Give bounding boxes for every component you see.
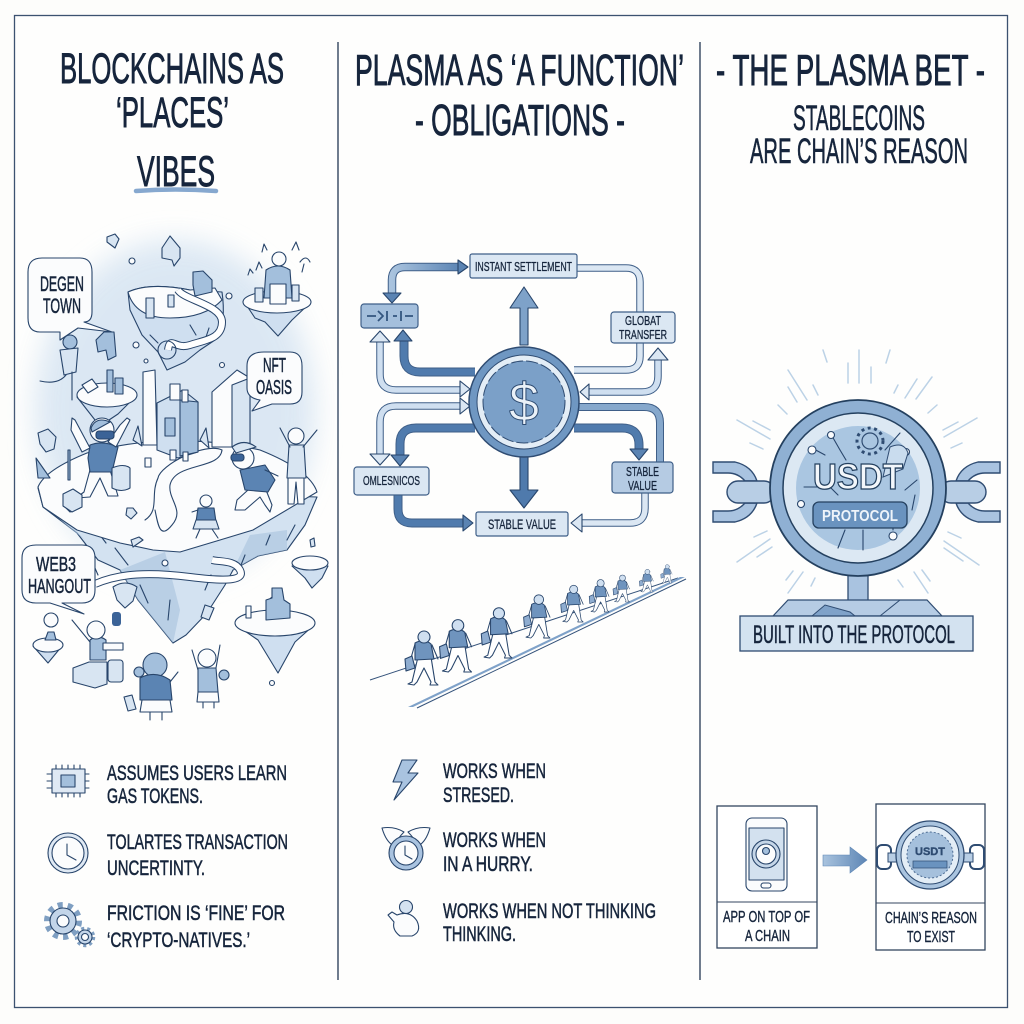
box: stable value bottom — [476, 512, 568, 536]
degen figure — [40, 335, 78, 400]
box: omlesnicos — [354, 467, 429, 495]
arrows: dark routes — [383, 260, 660, 531]
text: friction: FRICTION IS ‘FINE’ FOR — [107, 901, 285, 925]
speech bubble: degen town — [28, 258, 112, 340]
box: instant settlement — [470, 254, 577, 278]
card: app on top of a chain: APP ON TOP OF — [723, 909, 810, 926]
card: chain's reason to exist — [876, 804, 985, 950]
central dollar coin: $ — [509, 373, 539, 433]
text: gas tokens — [107, 761, 287, 808]
stem — [848, 575, 868, 602]
icon: lightning — [393, 760, 418, 800]
text: stressed: STRESED. — [443, 783, 514, 807]
text: hurry: IN A HURRY. — [443, 852, 533, 876]
text: stressed — [443, 759, 546, 807]
walkers — [405, 565, 672, 685]
lower right island — [235, 588, 315, 673]
illustration: USDT protocol seal — [713, 350, 1000, 651]
right small island — [292, 556, 328, 588]
card: chain's reason to exist: CHAIN’S REASON — [885, 910, 977, 927]
icon: gears — [47, 905, 94, 946]
city towers — [133, 370, 250, 467]
box: global transfer: TRANSFER — [619, 327, 667, 342]
right chain link — [940, 462, 1000, 522]
heading: plasma bet — [716, 46, 985, 171]
text: friction — [107, 901, 285, 952]
box: stable value bottom: STABLE VALUE — [488, 516, 556, 532]
text: not thinking: THINKING. — [443, 922, 516, 946]
mini seal — [877, 821, 984, 889]
small hanging rock — [113, 583, 137, 608]
text: uncertainty — [107, 830, 288, 880]
illustration: floating islands — [22, 234, 328, 720]
text: friction: ‘CRYPTO-NATIVES.’ — [107, 928, 250, 952]
box: stable value right: VALUE — [628, 478, 657, 493]
card: app on top of a chain: A CHAIN — [745, 928, 790, 945]
heading: blockchains as places: VIBES — [137, 148, 215, 196]
seated person — [72, 612, 123, 688]
icon: clock — [48, 833, 88, 873]
speech bubble: degen town: DEGEN — [40, 273, 84, 296]
text: gas tokens: ASSUMES USERS LEARN — [107, 761, 287, 785]
icon: winged clock — [382, 828, 430, 870]
arrows: light routes — [370, 268, 668, 532]
card: app on top of a chain — [717, 806, 817, 948]
panel: the plasma bet — [713, 46, 1000, 950]
main floating island — [38, 441, 317, 643]
text: uncertainty: UNCERTINTY. — [107, 856, 205, 880]
box: global transfer — [611, 312, 675, 343]
text: gas tokens: GAS TOKENS. — [107, 784, 203, 808]
box: stable value right: STABLE — [626, 464, 659, 479]
rocks — [36, 234, 315, 686]
panel: plasma as a function — [354, 46, 686, 946]
speech bubble: web3 hangout: HANGOUT — [28, 576, 91, 598]
speech bubble: nft oasis: NFT — [263, 355, 286, 377]
panel: blockchains as places — [22, 45, 328, 952]
box: omlesnicos: OMLESNICOS — [363, 473, 420, 488]
heading: blockchains as places: BLOCKCHAINS AS — [60, 45, 284, 93]
seal — [770, 400, 946, 576]
left chain link — [713, 462, 775, 522]
left small island with towers — [77, 332, 137, 424]
person waving — [280, 428, 317, 504]
text: stressed: WORKS WHEN — [443, 759, 546, 783]
banner: built into the protocol — [740, 616, 973, 651]
arrow: down — [510, 455, 538, 508]
lower left island — [33, 613, 63, 663]
speech bubble: degen town: TOWN — [43, 295, 81, 318]
arrow: up — [510, 287, 538, 345]
top floating island — [128, 271, 223, 370]
box: icons node — [361, 304, 418, 328]
bullet list: places — [47, 761, 288, 952]
radiating lines — [737, 350, 979, 593]
base rocks — [773, 600, 942, 616]
heading: plasma function: PLASMA AS ‘A FUNCTION’ — [355, 46, 684, 95]
person with vr headset — [64, 418, 130, 512]
text: not thinking — [443, 899, 656, 946]
speech bubble: nft oasis: OASIS — [256, 377, 292, 399]
box: instant settlement: INSTANT SETTLEMENT — [475, 259, 572, 274]
seal: USDT — [813, 456, 903, 497]
arrow: app to chain — [823, 847, 867, 873]
icon: chip — [47, 765, 89, 797]
bullet list: function — [382, 759, 656, 946]
seal: PROTOCOL — [822, 508, 898, 525]
text: hurry: WORKS WHEN — [443, 828, 546, 852]
person from behind — [124, 653, 178, 720]
text: uncertainty: TOLARTES TRANSACTION — [107, 830, 288, 854]
icon: person — [388, 900, 419, 936]
waving person — [192, 645, 229, 708]
mini seal: USDT — [915, 846, 945, 858]
person with vr bending — [231, 442, 278, 512]
child figure — [192, 495, 219, 538]
road — [370, 577, 686, 708]
box: global transfer: GLOBAT — [625, 313, 661, 328]
heading: plasma function — [355, 46, 684, 145]
card: chain's reason to exist: TO EXIST — [907, 929, 955, 946]
flow diagram — [354, 254, 675, 536]
column divider right — [699, 42, 701, 980]
text: hurry — [443, 828, 546, 876]
top right island with person — [243, 242, 311, 336]
text: not thinking: WORKS WHEN NOT THINKING — [443, 899, 656, 923]
speech bubble: nft oasis — [247, 352, 302, 411]
box: stable value right — [612, 462, 673, 493]
illustration: people walking along a road — [370, 565, 686, 708]
speech bubble: web3 hangout: WEB3 — [36, 554, 76, 576]
central dollar coin — [469, 347, 579, 457]
column divider left — [337, 42, 339, 980]
speech bubble: web3 hangout — [22, 545, 95, 614]
heading: blockchains as places: ‘PLACES’ — [116, 89, 229, 137]
icon: phone — [746, 818, 787, 891]
heading: plasma function: - OBLIGATIONS - — [415, 96, 625, 145]
heading: blockchains as places — [60, 45, 284, 196]
